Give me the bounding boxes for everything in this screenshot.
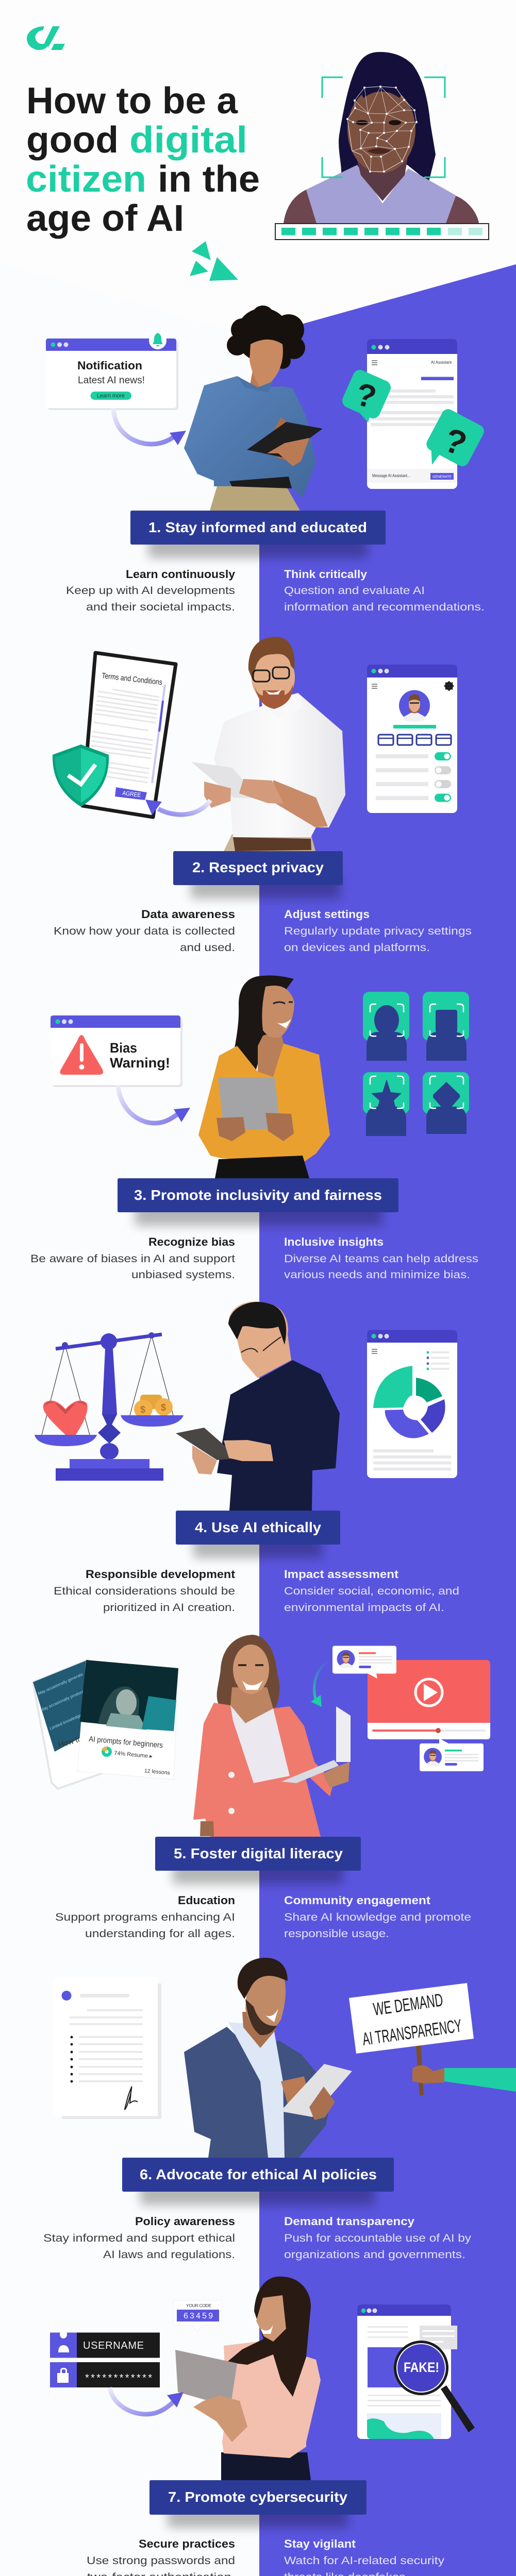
title: citizen <box>26 159 146 200</box>
heading 5: 5. Foster digital literacy <box>174 1845 343 1861</box>
text: responsible development <box>54 1568 236 1614</box>
icon: question bubble 2: ? <box>439 420 472 463</box>
text: learn continuously: and their societal impacts. <box>86 601 235 613</box>
text: inclusive insights: various needs and minimize bias. <box>284 1268 470 1281</box>
text: stay vigilant: Stay vigilant <box>284 2537 356 2550</box>
phone: terms and conditions: AGREE <box>122 789 141 799</box>
text: learn continuously <box>66 568 236 613</box>
person: man with tablet <box>176 1301 340 1511</box>
hero: facial recognition portrait <box>284 52 479 223</box>
text: community engagement: Share AI knowledge and promote <box>284 1911 471 1923</box>
icon: heart <box>43 1401 88 1435</box>
text: think critically: Think critically <box>284 568 368 581</box>
text: policy awareness: Stay informed and support ethical <box>43 2232 235 2244</box>
text: responsible development: Ethical considerations should be <box>54 1585 235 1597</box>
arrow: notification to person <box>113 408 186 445</box>
brand logo <box>27 26 65 50</box>
icon: coins: $ <box>140 1404 145 1415</box>
title: How to be a <box>26 80 238 122</box>
text: data awareness: and used. <box>180 941 235 954</box>
title: age of AI <box>26 198 184 239</box>
text: community engagement: responsible usage. <box>284 1927 389 1940</box>
login form <box>50 2330 160 2387</box>
text: recognize bias: unbiased systems. <box>131 1268 235 1281</box>
login form: ************ <box>85 2372 152 2384</box>
hero progress bar <box>275 224 489 240</box>
phone: terms and conditions: Terms and Conditions <box>102 671 163 687</box>
text: data awareness: Know how your data is collected <box>54 925 235 937</box>
icon: question bubble 1: ? <box>352 377 380 416</box>
text: data awareness <box>54 908 235 954</box>
person: woman in coral blazer <box>193 1635 351 1837</box>
icon: user <box>58 2330 69 2352</box>
title: in the <box>158 159 260 200</box>
person: man with glasses <box>191 637 345 851</box>
text: adjust settings: on devices and platforms. <box>284 941 430 954</box>
AI assistant phone: AI Assistant <box>431 360 452 365</box>
text: policy awareness: Policy awareness <box>135 2215 235 2228</box>
text: impact assessment: Impact assessment <box>284 1568 399 1581</box>
protest sign <box>349 1983 516 2095</box>
face recognition grid <box>363 992 469 1136</box>
text: demand transparency: Push for accountable use of AI by <box>284 2232 471 2244</box>
arrow: man to phone <box>145 800 210 815</box>
verification code bubble: 63459 <box>184 2312 213 2320</box>
fake news phone <box>357 2304 475 2439</box>
icon: question bubble 2 <box>424 407 487 469</box>
protest sign: WE DEMAND <box>372 1990 444 2020</box>
text: stay vigilant <box>284 2537 444 2576</box>
text: secure practices: Secure practices <box>139 2537 235 2550</box>
text: education <box>55 1894 235 1940</box>
heading 6 <box>122 2158 394 2205</box>
text: inclusive insights: Inclusive insights <box>284 1235 384 1248</box>
heading 1: 1. Stay informed and educated <box>148 519 367 535</box>
arrow: warning to person <box>118 1085 190 1123</box>
text: education: Support programs enhancing AI <box>55 1911 235 1923</box>
notification window <box>46 332 178 410</box>
verification code bubble: YOUR CODE <box>186 2303 211 2308</box>
icon: lock <box>57 2368 69 2383</box>
AI assistant phone <box>367 339 457 489</box>
settings phone <box>367 665 457 813</box>
text: impact assessment <box>284 1568 459 1614</box>
text: community engagement <box>284 1894 471 1940</box>
heading 4 <box>176 1511 340 1558</box>
course cards <box>33 1660 178 1789</box>
course cards: AI prompts for beginners <box>89 1735 163 1750</box>
bias warning window: Warning! <box>110 1055 170 1071</box>
text: policy awareness: AI laws and regulations. <box>103 2248 235 2261</box>
icon: warning triangle <box>60 1035 103 1075</box>
text: responsible development: prioritized in AI creation. <box>103 1601 235 1614</box>
arrow: chat to person <box>311 1660 329 1707</box>
course cards: 74% Resume ▸ <box>114 1750 153 1760</box>
course cards: How to <box>57 1735 83 1750</box>
person: woman in orange top <box>198 975 330 1178</box>
heading 6: 6. Advocate for ethical AI policies <box>140 2166 377 2182</box>
title: digital <box>129 120 247 161</box>
AI assistant phone: GENERATE <box>432 475 452 479</box>
heading 3 <box>118 1178 398 1226</box>
icon: coins <box>134 1395 173 1418</box>
icon: gear <box>444 681 454 691</box>
text: adjust settings: Regularly update privacy settings <box>284 925 472 937</box>
heading 7: 7. Promote cybersecurity <box>168 2489 347 2505</box>
icon: magnifier: FAKE! <box>404 2360 439 2375</box>
course cards: 12 lessons <box>144 1768 170 1776</box>
text: education: Education <box>178 1894 235 1907</box>
donut chart <box>373 1366 445 1438</box>
bias warning window: Bias <box>110 1040 137 1056</box>
text: learn continuously: Keep up with AI developments <box>66 584 235 597</box>
text: think critically: Question and evaluate AI <box>284 584 425 597</box>
text: think critically <box>284 568 485 613</box>
chat bubble bottom <box>420 1738 484 1771</box>
scales of ethics <box>35 1332 184 1481</box>
icon: bell <box>153 333 163 346</box>
notification window: Latest AI news! <box>78 375 145 386</box>
chart phone <box>367 1330 457 1478</box>
text: demand transparency: Demand transparency <box>284 2215 415 2228</box>
text: inclusive insights <box>284 1235 478 1281</box>
text: responsible development: Responsible development <box>86 1568 236 1581</box>
text: demand transparency: organizations and governments. <box>284 2248 465 2261</box>
heading 4: 4. Use AI ethically <box>195 1519 321 1535</box>
text: data awareness: Data awareness <box>141 908 235 921</box>
verification code bubble <box>173 2300 222 2332</box>
icon: question bubble 1 <box>340 368 393 422</box>
notification window: Learn more <box>97 393 125 399</box>
title: good <box>26 120 119 161</box>
text: recognize bias: Be aware of biases in AI and support <box>30 1252 235 1265</box>
phone: terms and conditions <box>82 653 176 817</box>
icon: shield <box>53 744 109 807</box>
person: woman with tablet <box>184 306 323 511</box>
decorative green triangles <box>190 241 238 281</box>
text: recognize bias: Recognize bias <box>148 1235 235 1248</box>
icon: magnifier <box>394 2341 475 2432</box>
login form: USERNAME <box>83 2340 144 2351</box>
heading 1 <box>130 511 386 558</box>
text: recognize bias <box>30 1235 235 1281</box>
policy document <box>53 1977 161 2119</box>
text: demand transparency <box>284 2215 471 2261</box>
heading 5 <box>155 1837 361 1884</box>
signature <box>125 2087 138 2110</box>
text: learn continuously: Learn continuously <box>126 568 236 581</box>
text: secure practices: Use strong passwords and <box>87 2554 235 2567</box>
person: man in blazer <box>184 1958 352 2158</box>
icon: coins: $ <box>161 1402 166 1413</box>
text: secure practices <box>87 2537 235 2576</box>
text: impact assessment: Consider social, economic, and <box>284 1585 459 1597</box>
text: inclusive insights: Diverse AI teams can help address <box>284 1252 478 1265</box>
text: stay vigilant: Watch for AI-related security <box>284 2554 444 2567</box>
bias warning window <box>51 1015 182 1087</box>
course cards: May occasionally generate <box>37 1672 84 1696</box>
text: think critically: information and recommendations. <box>284 601 485 613</box>
text: adjust settings: Adjust settings <box>284 908 370 921</box>
course cards: May occasionally produce harmful <box>40 1683 99 1713</box>
person: woman with long hair <box>175 2277 321 2480</box>
AI assistant phone: Message AI Assistant... <box>372 473 410 478</box>
heading 2 <box>173 851 343 899</box>
chat bubble top <box>332 1646 396 1679</box>
text: impact assessment: environmental impacts of AI. <box>284 1601 444 1614</box>
arrow: login to tablet <box>110 2387 184 2414</box>
heading 7 <box>149 2480 367 2528</box>
text: adjust settings <box>284 908 472 954</box>
video player <box>368 1660 490 1739</box>
text: community engagement: Community engagement <box>284 1894 431 1907</box>
notification window: Notification <box>77 359 142 372</box>
title <box>26 80 260 239</box>
text: education: understanding for all ages. <box>85 1927 235 1940</box>
hand and sleeve <box>412 2065 516 2092</box>
text: policy awareness <box>43 2215 235 2261</box>
heading 2: 2. Respect privacy <box>192 859 324 875</box>
course cards: Limited knowledge of world <box>49 1706 96 1731</box>
heading 3: 3. Promote inclusivity and fairness <box>134 1187 382 1203</box>
